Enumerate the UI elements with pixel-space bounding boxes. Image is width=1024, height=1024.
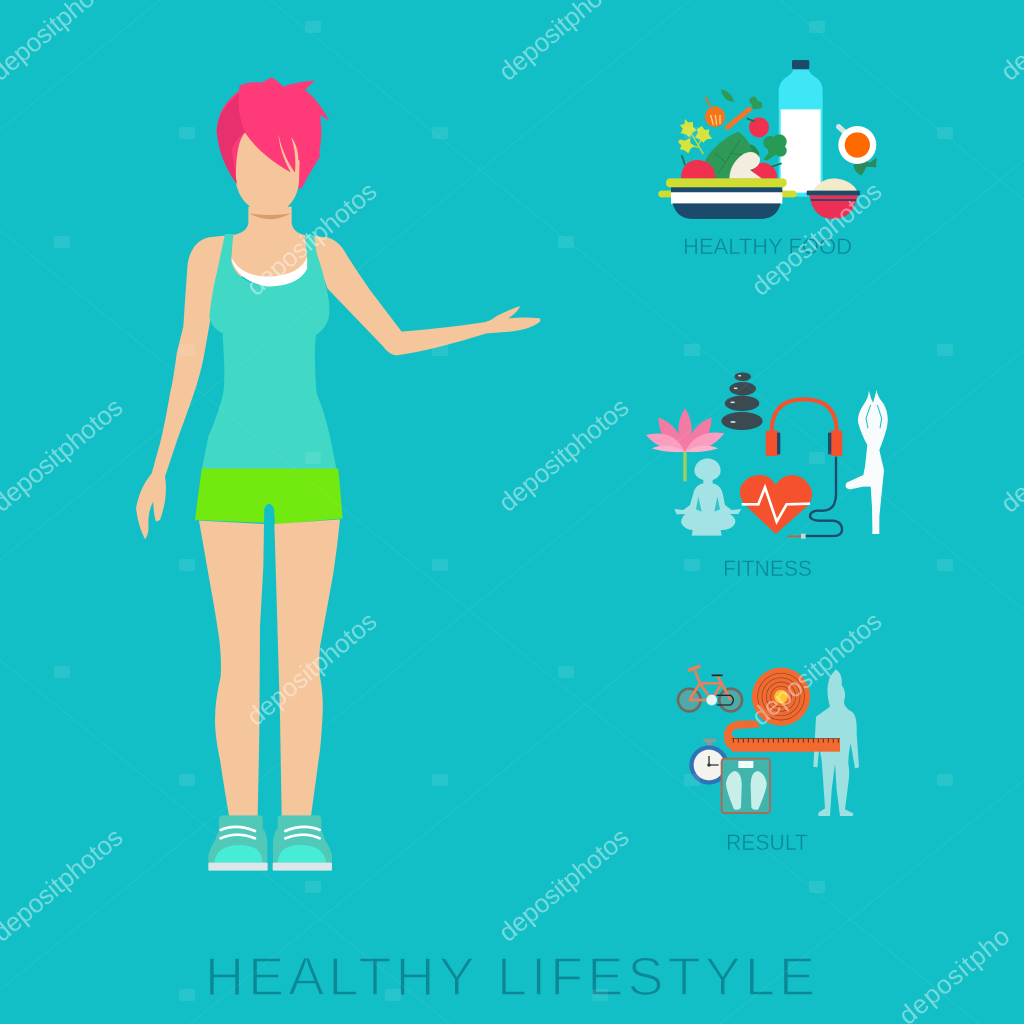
icon: rice bowl [807,178,860,219]
label: fitness: FITNESS [723,556,812,581]
icon: tea cup [838,126,877,175]
icon: salad bowl [658,178,797,219]
icon group: healthy food [658,60,877,219]
icon: headphones [766,399,842,539]
watermark layer: depositphotos [746,606,887,732]
icon: water bottle [779,60,823,197]
watermark layer: depositphotos [241,606,382,732]
watermark layer: depositphotos [493,822,634,948]
label: result: RESULT [726,830,808,855]
left leg [199,521,264,816]
icon: stopwatch [689,739,729,785]
right shoe [273,815,332,871]
hair dark side [217,93,245,184]
neck [231,207,307,277]
icon: bathroom scale [722,759,770,813]
watermark layer: depositphotos [493,392,634,518]
icon group: result [678,667,859,816]
icon: bicycle [678,667,742,711]
left shoe [208,815,268,871]
label: healthy food: HEALTHY FOOD [683,234,852,259]
icon: lotus [646,408,724,481]
watermark layer: depositphotos [746,176,887,302]
hair fringe [242,103,320,188]
tank top [202,234,337,470]
right arm and hand [310,235,540,355]
icon: stacked stones [721,372,763,430]
white collar [231,257,307,287]
figure: woman upper body [136,77,540,539]
icon: meditating person [674,458,741,536]
watermark layer: depositphotos [241,176,382,302]
hair side wisp [230,149,237,185]
icon: heart with pulse [740,475,812,534]
icon: measuring tape [724,668,840,752]
right leg [274,519,340,816]
shorts [195,469,343,524]
title: HEALTHY LIFESTYLE [205,947,815,1007]
left arm [136,235,230,539]
icon: body silhouette [813,669,859,816]
icon: yoga pose silhouette [846,390,888,534]
tape strap ruler [732,738,840,752]
icon: vegetables [678,89,787,178]
chin shadow [249,213,291,219]
face [236,130,300,214]
hair back [217,77,329,188]
icon group: fitness [646,372,888,539]
figure: woman legs and shoes [199,519,340,871]
